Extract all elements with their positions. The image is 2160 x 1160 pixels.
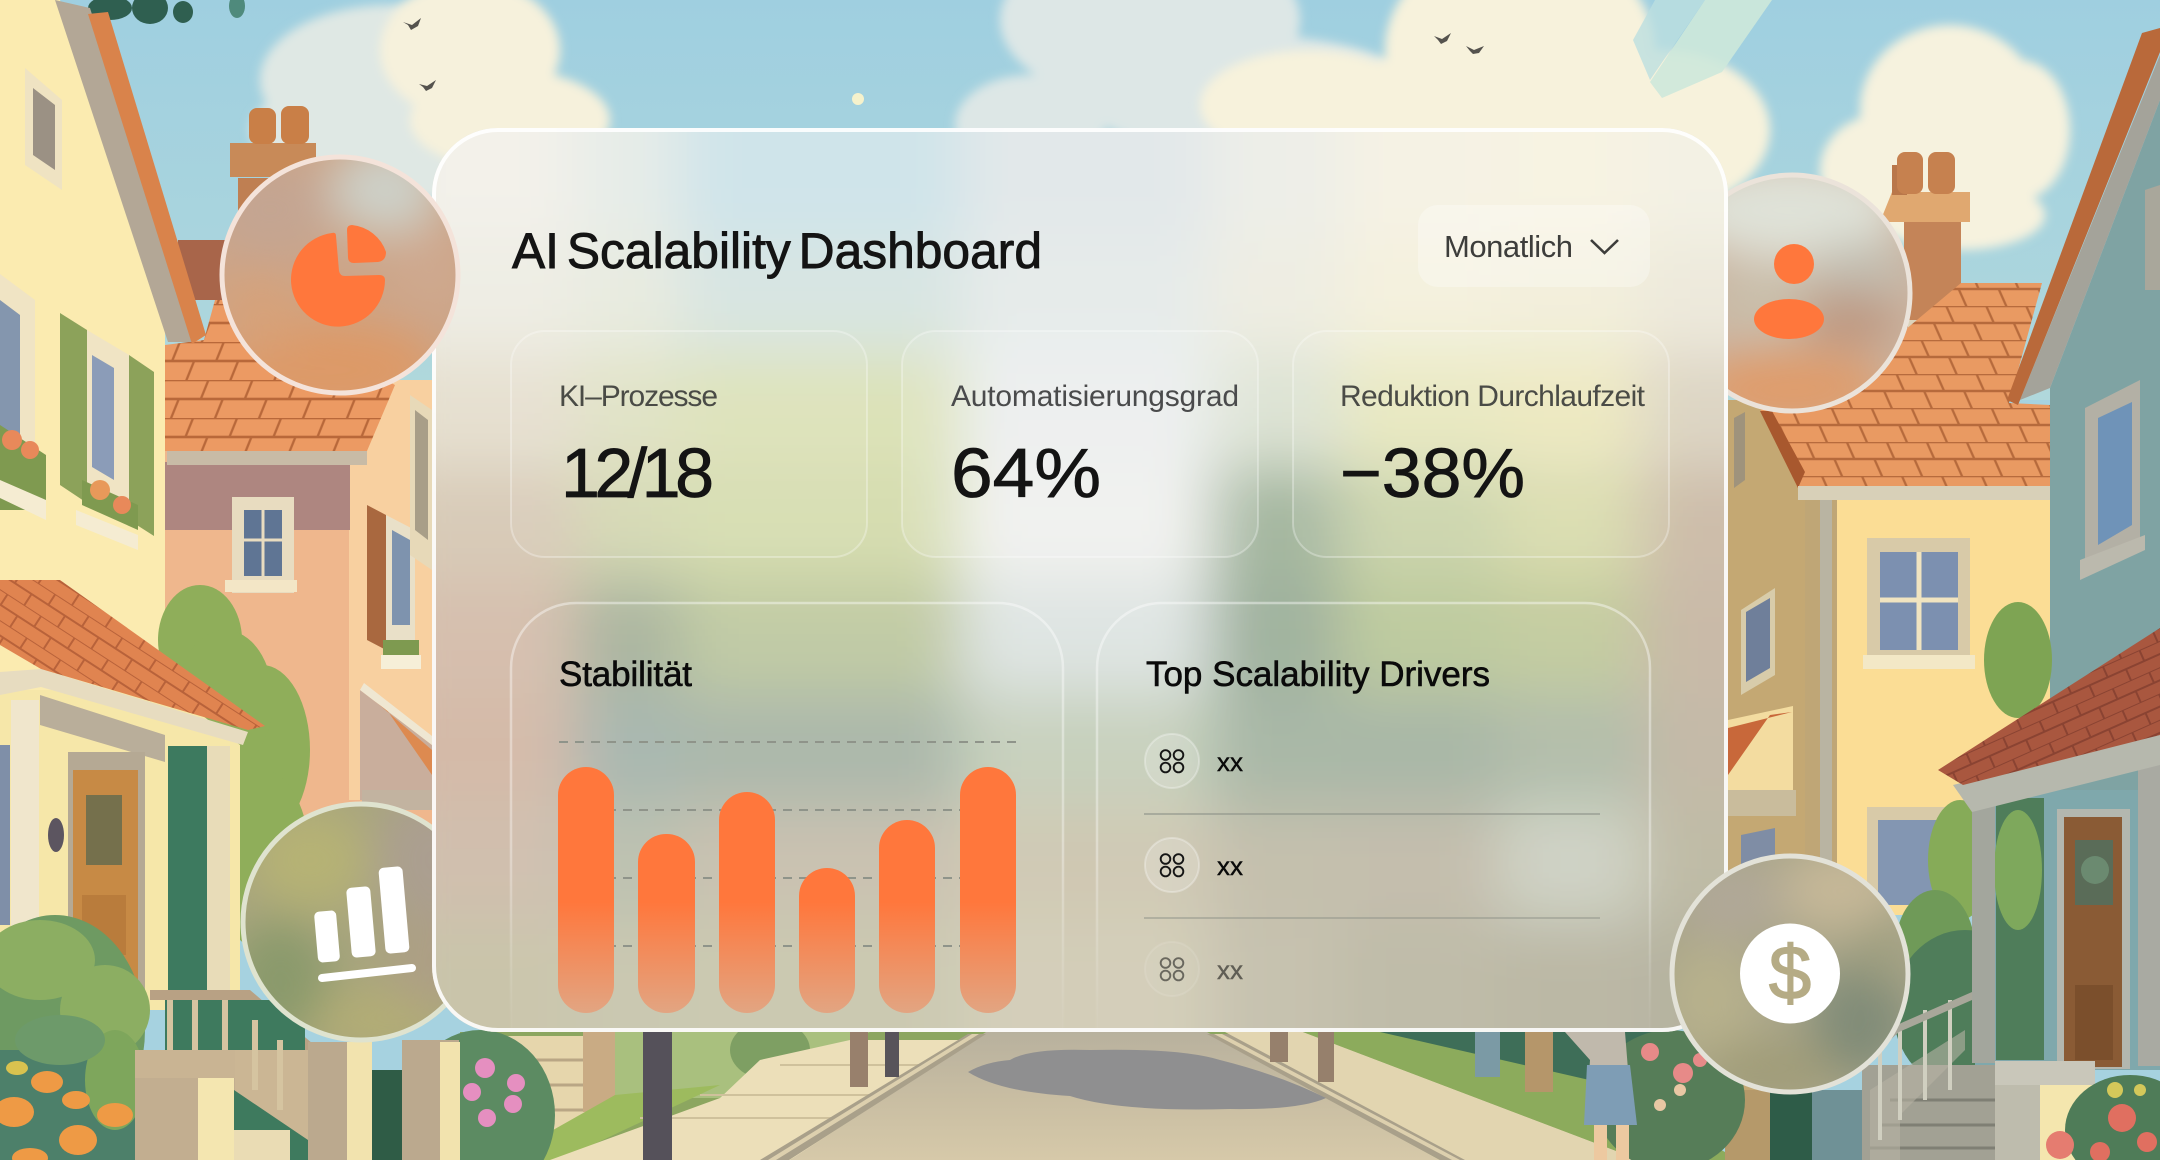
left awning xyxy=(360,683,432,810)
KPI card: Reduktion Durchlaufzeit: Reduktion Durchlaufzeit xyxy=(1340,380,1646,413)
left porch xyxy=(0,580,265,1022)
icon badge: bar chart xyxy=(240,802,446,1042)
right bushes xyxy=(1893,602,2052,1090)
heading: Top Scalability Drivers xyxy=(1146,655,1490,694)
main glass panel xyxy=(432,128,1728,1032)
left hedge with pink flowers xyxy=(402,1030,555,1160)
title: AI Scalability Dashboard xyxy=(512,223,1042,279)
window with green shutters xyxy=(60,313,154,550)
bar chart xyxy=(558,767,1016,1013)
person glyph xyxy=(1754,244,1824,339)
icon: chevron xyxy=(1591,240,1618,253)
teal gable house xyxy=(2050,100,2160,800)
period dropdown: Monatlich xyxy=(1444,229,1573,264)
icon badge: pie chart xyxy=(220,154,460,396)
right chimney xyxy=(1880,152,1970,328)
window left partial xyxy=(0,274,46,520)
pie glyph xyxy=(291,225,386,327)
KPI card: Reduktion Durchlaufzeit xyxy=(1293,331,1669,557)
right porch xyxy=(1938,628,2160,1070)
tree leaves top-left xyxy=(0,0,245,44)
panel: Stabilität chart xyxy=(511,603,1063,1032)
sky xyxy=(0,0,2160,400)
peach house shutter window xyxy=(367,505,421,669)
main yellow-wall window xyxy=(1863,538,1975,669)
KPI card: Automatisierungsgrad xyxy=(902,331,1258,557)
driver row 1 xyxy=(1145,734,1243,788)
left house behind: pink house and roof xyxy=(165,440,432,940)
left steps and railing xyxy=(135,990,404,1160)
lower window on yellow wall xyxy=(1867,807,1972,905)
tree shadow on road xyxy=(968,1050,1326,1109)
KPI card: KI-Prozesse: 12/18 xyxy=(561,434,714,512)
right upper windows xyxy=(1734,412,1775,695)
right awning xyxy=(1728,706,1796,875)
KPI card: Automatisierungsgrad: 64% xyxy=(951,434,1101,512)
attic window xyxy=(25,68,62,190)
left orange roof xyxy=(165,300,395,451)
yellow gable house xyxy=(0,0,165,760)
bars glyph xyxy=(314,866,412,978)
icon badge: dollar: $ xyxy=(1769,931,1811,1016)
left chimney xyxy=(230,106,316,238)
KPI card: KI-Prozesse: KI–Prozesse xyxy=(559,380,718,413)
blurred glass backdrop xyxy=(432,131,1728,1032)
icon badge: person xyxy=(1728,172,1912,414)
heading: Stabilität xyxy=(559,655,692,694)
KPI card: Reduktion Durchlaufzeit: −38% xyxy=(1340,434,1525,512)
driver row 1: xx xyxy=(1217,747,1243,777)
street ground xyxy=(460,1020,1740,1160)
lamp post xyxy=(643,1032,672,1160)
driver row 3 xyxy=(1145,942,1243,996)
driver row 2: xx xyxy=(1217,851,1243,881)
left stairs and pale hedge xyxy=(470,1036,615,1160)
KPI card: Automatisierungsgrad: Automatisierungsgrad xyxy=(951,380,1239,413)
teal house windows xyxy=(2080,185,2160,580)
right orange roof xyxy=(1740,283,2050,488)
KPI card: KI-Prozesse xyxy=(511,331,867,557)
clouds xyxy=(250,0,2070,250)
icon badge: dollar xyxy=(1665,850,1912,1100)
grid lines xyxy=(559,742,1016,946)
period dropdown xyxy=(1418,205,1650,287)
driver row 2 xyxy=(1145,838,1243,892)
right door xyxy=(2057,809,2130,1069)
pink house window xyxy=(225,497,297,593)
panel: Top Scalability Drivers xyxy=(1097,603,1650,1032)
right steps and flowers xyxy=(1725,992,2160,1160)
left front bushes and flowers xyxy=(0,915,150,1160)
pink flower bush and pedestrian right xyxy=(1475,1030,1745,1160)
left door xyxy=(73,770,138,1020)
birds xyxy=(403,18,1484,91)
left bushes behind porch xyxy=(158,585,310,950)
right house: tan and yellow xyxy=(1728,400,1808,1160)
driver row 3: xx xyxy=(1217,955,1243,985)
